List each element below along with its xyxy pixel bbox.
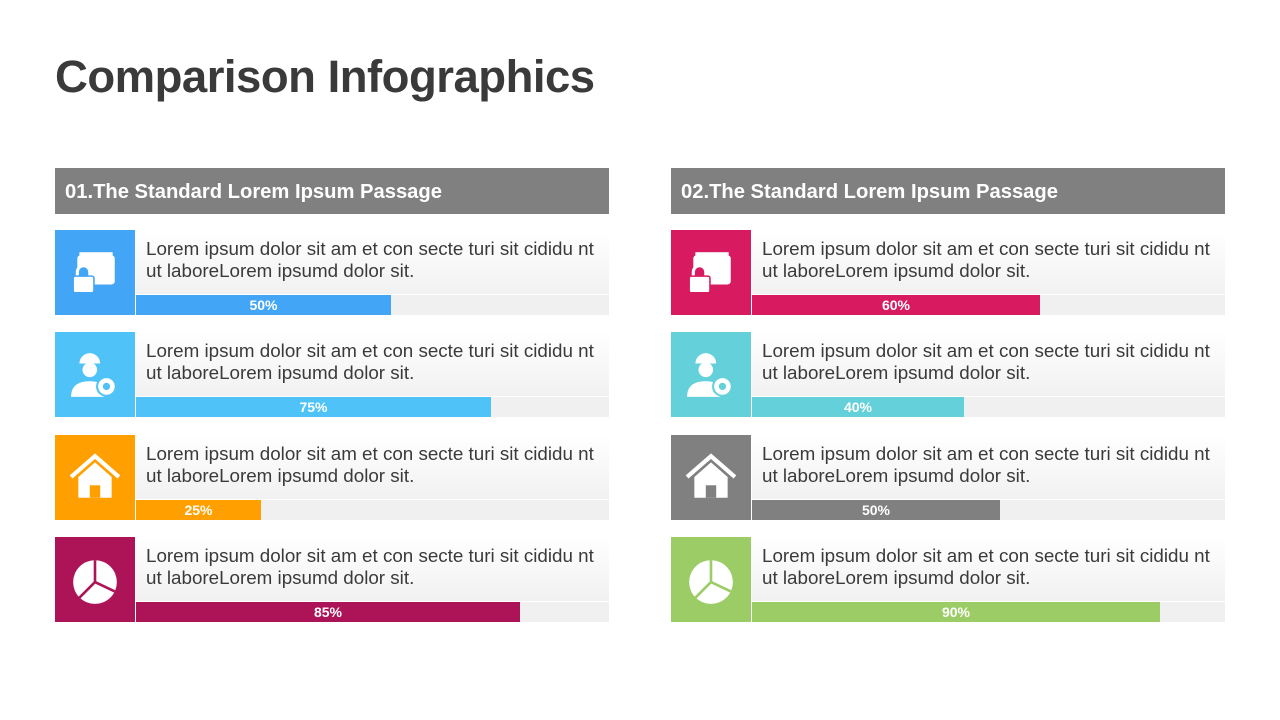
icon: worker	[55, 332, 135, 417]
bar 50%	[136, 295, 609, 315]
text: ut laboreLorem ipsumd dolor sit.	[762, 465, 1030, 486]
right row 3	[671, 435, 1225, 520]
title: Comparison Infographics	[55, 51, 595, 102]
bar 60%	[752, 295, 1225, 315]
text: Lorem ipsum dolor sit am et con secte turi sit cididu nt	[146, 340, 594, 361]
panel header: right	[671, 168, 1225, 214]
text	[752, 332, 1225, 396]
bar 85%	[136, 602, 609, 622]
text: Lorem ipsum dolor sit am et con secte turi sit cididu nt	[146, 545, 594, 566]
text: ut laboreLorem ipsumd dolor sit.	[146, 465, 414, 486]
bar 25%	[136, 500, 609, 520]
panel header: left	[55, 168, 609, 214]
text: Lorem ipsum dolor sit am et con secte turi sit cididu nt	[762, 238, 1210, 259]
panel header: left: 01.The Standard Lorem Ipsum Passage	[65, 181, 442, 203]
bar 40%	[752, 397, 1225, 417]
bar 75%: 75%	[299, 399, 328, 415]
bar 90%: 90%	[942, 604, 970, 620]
icon: house	[55, 435, 135, 520]
bar 50%: 50%	[249, 297, 278, 313]
text: ut laboreLorem ipsumd dolor sit.	[762, 362, 1030, 383]
icon: box lock	[55, 230, 135, 315]
text	[136, 435, 609, 499]
icon: box lock	[671, 230, 751, 315]
text: ut laboreLorem ipsumd dolor sit.	[762, 260, 1030, 281]
left row 4	[55, 537, 609, 622]
bar 85%: 85%	[314, 604, 342, 620]
icon: pie chart	[671, 537, 751, 622]
right row 2	[671, 332, 1225, 417]
text: Lorem ipsum dolor sit am et con secte turi sit cididu nt	[146, 443, 594, 464]
text	[752, 537, 1225, 601]
text: Lorem ipsum dolor sit am et con secte turi sit cididu nt	[762, 443, 1210, 464]
text: Lorem ipsum dolor sit am et con secte turi sit cididu nt	[762, 340, 1210, 361]
text	[136, 230, 609, 294]
text	[752, 435, 1225, 499]
bar 50%	[752, 500, 1225, 520]
icon: worker	[671, 332, 751, 417]
right row 1	[671, 230, 1225, 315]
bar 60%: 60%	[882, 297, 910, 313]
text: ut laboreLorem ipsumd dolor sit.	[146, 260, 414, 281]
bar 40%: 40%	[844, 399, 872, 415]
text: Lorem ipsum dolor sit am et con secte turi sit cididu nt	[762, 545, 1210, 566]
icon: house	[671, 435, 751, 520]
text: ut laboreLorem ipsumd dolor sit.	[146, 362, 414, 383]
left row 3	[55, 435, 609, 520]
left row 1	[55, 230, 609, 315]
text	[136, 332, 609, 396]
bar 25%: 25%	[184, 502, 213, 518]
bar 75%	[136, 397, 609, 417]
icon: pie chart	[55, 537, 135, 622]
bar 50%: 50%	[862, 502, 890, 518]
text	[752, 230, 1225, 294]
bar 90%	[752, 602, 1225, 622]
panel header: right: 02.The Standard Lorem Ipsum Passage	[681, 181, 1058, 203]
text: ut laboreLorem ipsumd dolor sit.	[146, 567, 414, 588]
text: Lorem ipsum dolor sit am et con secte turi sit cididu nt	[146, 238, 594, 259]
text	[136, 537, 609, 601]
right row 4	[671, 537, 1225, 622]
left row 2	[55, 332, 609, 417]
text: ut laboreLorem ipsumd dolor sit.	[762, 567, 1030, 588]
